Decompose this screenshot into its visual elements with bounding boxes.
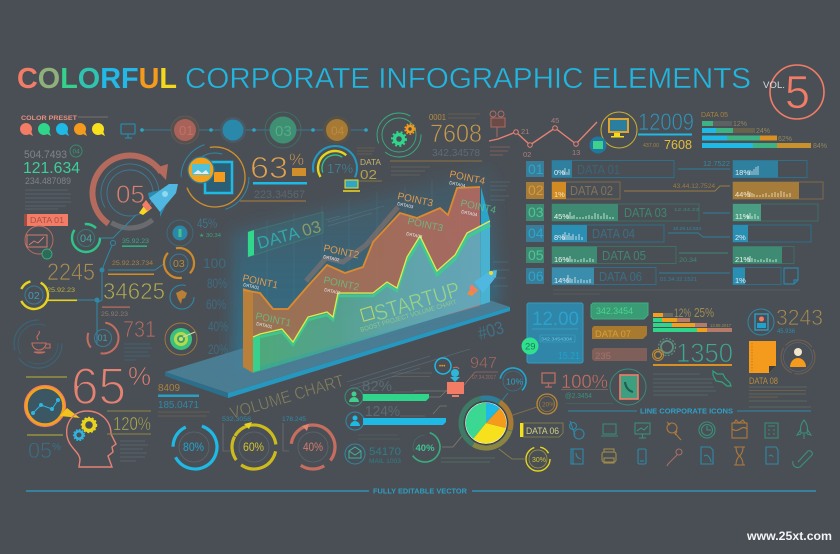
icon: clock — [699, 422, 715, 438]
panel: volume chart: DATA04 — [449, 180, 466, 188]
y axis labels: 100 — [203, 255, 226, 271]
bars: data 05: 12% — [733, 121, 747, 128]
ring: 20%: 20% — [542, 402, 555, 408]
label: data 02: 02 — [360, 167, 377, 182]
back series: red area — [243, 187, 480, 368]
chat and person icon with 947 — [435, 355, 498, 396]
line chart — [489, 116, 597, 159]
labels: back series points: POINT3 — [396, 191, 434, 210]
dial: 17% with laptop — [310, 143, 360, 193]
ring: 30% — [499, 447, 550, 471]
ring: 04: 04 — [80, 233, 92, 245]
tag: 342.3454 — [591, 303, 648, 319]
row 01: DATA 01 — [577, 162, 620, 177]
icon: person circle — [781, 340, 815, 374]
stat: mail 54170: MAIL 1003 — [369, 458, 401, 465]
y axis labels: 20% — [208, 341, 228, 357]
watermark: www.25xt.com — [746, 529, 832, 543]
table: numbered data rows — [526, 160, 699, 285]
row 03 — [526, 204, 699, 221]
icon grid row one — [570, 420, 811, 440]
ring: 60%: 60% — [243, 442, 264, 454]
label: startup: BOOST PROJECT VOLUME CHART — [360, 299, 457, 334]
stat: 63%: % — [289, 150, 304, 169]
stat: 12009: 12009 — [638, 109, 694, 136]
left stats: 234.487089 — [25, 176, 71, 187]
label: data 02: DATA — [360, 158, 382, 167]
y axis labels — [203, 255, 228, 379]
table: connectors: 01.34.32.1521 — [660, 277, 697, 283]
icon: microphone — [667, 449, 682, 466]
table: right bars — [733, 160, 823, 285]
y axis labels: 60% — [206, 296, 226, 312]
bars: stacked: 12% — [674, 306, 691, 320]
row 05: 05 — [528, 247, 544, 263]
line chart: 45 — [551, 116, 559, 125]
table: connectors: 43.44.12.7524 — [673, 184, 716, 190]
row 04: 04 — [528, 225, 544, 241]
tag: 342.3454: 342.3454 — [596, 306, 633, 317]
table: connectors: 12.7522 — [703, 161, 730, 168]
icon: monitor circle — [590, 112, 637, 154]
front series: blue green area — [253, 221, 490, 373]
panel: volume chart: DATA03 — [406, 231, 423, 239]
title: CORPORATE INFOGRAPHIC ELEMENTS — [185, 63, 751, 95]
y axis labels: 0% — [214, 363, 228, 379]
color preset — [20, 115, 108, 136]
icon: notebook — [571, 449, 583, 464]
table: connectors: 12.34.23 — [674, 207, 700, 212]
icon: floppy — [701, 447, 713, 464]
icon: gears circle — [377, 113, 421, 157]
ring: 30%: 30% — [532, 457, 546, 464]
row 05: DATA 05 — [602, 248, 646, 263]
line chart: 13 — [572, 148, 580, 157]
ring: 01 and 731: 01 — [98, 333, 108, 343]
stat: 7608 — [390, 112, 482, 175]
row 02: DATA 02 — [570, 183, 613, 198]
bars: stacked — [653, 305, 732, 332]
badge: vol 5: 5 — [785, 66, 810, 118]
chat and person icon with 947: 07.34.2017 — [472, 375, 496, 381]
icon: document — [784, 268, 798, 284]
timeline: 03 — [275, 123, 292, 140]
heading: line corporate icons: LINE CORPORATE ICONS — [640, 408, 733, 416]
icon: rocket — [139, 184, 178, 217]
icon: info circle with 45%: 45% — [197, 215, 217, 231]
color preset: COLOR PRESET — [21, 115, 78, 122]
icon: gears — [570, 421, 584, 439]
tag: data 01 — [24, 214, 68, 226]
icon: calculator — [765, 423, 778, 438]
row 01: 0% — [554, 168, 565, 177]
ring: 02: 02 — [28, 290, 40, 302]
line chart: 21 — [521, 127, 529, 136]
icon: coffee cup — [14, 320, 62, 368]
label: data 02 — [357, 148, 382, 182]
icon: display — [635, 423, 650, 438]
badge: vol 5: VOL. — [763, 80, 785, 91]
tag: 235 — [592, 348, 647, 362]
stat: 120% — [107, 411, 151, 461]
bars: data 05: 84% — [813, 143, 827, 150]
stat: 05%: 05 — [28, 438, 52, 463]
row 05 — [526, 246, 676, 264]
label: #03: #03 — [475, 317, 506, 344]
table: connectors: 20.34 — [679, 257, 697, 264]
icon: file — [766, 447, 778, 464]
table: connectors: 10.29.12.534 — [673, 226, 702, 231]
stat: mail 54170 — [345, 435, 401, 465]
ring: 04 — [72, 224, 100, 252]
labels: back series points — [241, 169, 486, 292]
timeline — [121, 112, 368, 148]
row 06: 06 — [528, 268, 544, 284]
bar 4: 2% — [735, 233, 746, 242]
panel: time card: 15.21 — [558, 351, 580, 362]
icon: laptop — [601, 424, 618, 436]
ring labels: 532.3058 — [222, 416, 251, 423]
y axis labels: 80% — [207, 275, 227, 291]
ring: 03 — [162, 246, 196, 280]
row 06: DATA 06 — [599, 269, 642, 284]
stat: 120%: 120% — [113, 414, 151, 434]
stat: 7608: 7608 — [430, 120, 482, 148]
stat: 63%: 63 — [250, 150, 288, 185]
bar 1: 18% — [735, 168, 750, 177]
label: data 03: DATA 03 — [255, 217, 323, 253]
tag: 235: 235 — [595, 351, 611, 362]
icon: rocket line — [797, 420, 811, 439]
tag: data 06 — [520, 423, 563, 437]
row 01: 01 — [528, 161, 544, 177]
stat: 12009: 7608 — [664, 137, 692, 152]
panel: volume chart: DATA01 — [256, 321, 273, 329]
chart backdrop — [232, 170, 500, 376]
ring: 40% — [288, 422, 338, 472]
tree connectors with labels: 35.92.23 — [122, 238, 149, 245]
ring: 60% — [224, 417, 284, 477]
row 03: 45% — [554, 212, 569, 221]
left stats: 04 — [72, 148, 80, 156]
table: connectors — [624, 161, 730, 283]
panel: volume chart: DATA03 — [397, 201, 414, 209]
chat and person icon with 947: ••• — [439, 364, 445, 370]
row 06 — [526, 268, 656, 285]
row 02 — [526, 182, 620, 199]
stats: 8409 and 185.0471: 8409 — [158, 383, 180, 394]
y axis labels: 40% — [208, 318, 228, 334]
stat: 3243 with doc icon — [748, 305, 823, 335]
labels: front series points — [254, 198, 497, 330]
platform — [165, 286, 510, 393]
panel: time card: 29 — [525, 342, 536, 352]
panel: time card — [522, 303, 583, 363]
badge: vol 5 — [763, 65, 824, 119]
stat: 3243 with doc icon: 3243 — [776, 305, 823, 330]
tag: data 06: DATA 06 — [526, 426, 559, 436]
tag: data 07 — [592, 326, 647, 340]
dial: 17% with laptop: 17% — [327, 161, 353, 176]
ring: 10%: 10% — [506, 376, 523, 386]
left stats: 504.7493 — [24, 149, 67, 161]
stat: 12009 — [638, 109, 694, 152]
bar 5: 21% — [735, 255, 750, 264]
ring: 03: 03 — [173, 258, 185, 270]
title: COLORFUL — [17, 63, 177, 95]
ring labels — [222, 416, 306, 451]
icon: picture circle — [180, 142, 250, 212]
ring labels: 178.245 — [282, 416, 306, 423]
stat: mail 54170: 54170 — [369, 446, 401, 458]
ring: 02 — [15, 276, 77, 314]
stat: 05%: % — [52, 442, 61, 453]
progress: 124%: 124% — [365, 403, 400, 420]
ring: 10% — [498, 366, 528, 403]
icon: globe — [170, 285, 194, 309]
label: startup — [360, 277, 463, 334]
label: volume chart: VOLUME CHART — [228, 371, 346, 423]
right wall — [481, 187, 490, 305]
stat: 63% — [240, 150, 307, 201]
row 06: 14% — [554, 276, 569, 285]
icon: head with gears — [67, 411, 116, 467]
ring: 40% green — [406, 428, 495, 466]
icon: sale sign — [490, 111, 510, 155]
ring: 05 with arrow: 05 — [116, 181, 145, 209]
ring: 80% — [167, 419, 223, 475]
ring: 40% green: 40% — [416, 443, 435, 454]
label: startup: STARTUP — [371, 277, 463, 326]
bar 2: 44% — [735, 190, 750, 199]
left stats: 121.634 — [23, 160, 80, 177]
icon: wrench — [667, 422, 681, 440]
ring: 05 with arrow — [78, 141, 182, 245]
bars: data 05: DATA 05 — [701, 110, 728, 119]
stat: 65% — [26, 358, 151, 435]
panel: volume chart — [165, 169, 510, 423]
tag: data 07: DATA 07 — [595, 329, 631, 340]
icon: phone — [638, 449, 646, 464]
stat: 100% with phone book — [542, 369, 646, 405]
row 05: 16% — [554, 255, 569, 264]
ring: 80%: 80% — [183, 442, 204, 454]
labels: back series points: POINT2 — [322, 243, 360, 262]
stat: 100% with phone book: 100% — [561, 371, 608, 393]
ring: 01 and 731: 731 — [123, 316, 156, 342]
stat: 65%: % — [128, 361, 151, 391]
stat: 65%: 65 — [71, 358, 126, 416]
pie chart — [451, 388, 521, 458]
icon: paperclip — [793, 451, 812, 468]
text block with tool icon — [653, 371, 731, 395]
progress: 82%: 82% — [362, 378, 392, 395]
row 03: 03 — [528, 204, 544, 220]
row 04: 8% — [554, 233, 565, 242]
chat and person icon with 947: 947 — [470, 355, 497, 372]
labels: front series points: POINT2 — [322, 275, 360, 294]
stat: 100% with phone book: @2.3454 — [565, 393, 592, 400]
bar 3: 11% — [735, 212, 750, 221]
row 03: DATA 03 — [624, 205, 667, 220]
stat: 2245: 2245 — [47, 259, 95, 286]
timeline: 01 — [179, 123, 193, 138]
icon: monitor — [121, 124, 135, 138]
icon: info circle with 45%: ★ 30.34 — [199, 233, 221, 239]
bar 6: 1% — [735, 276, 746, 285]
tree connectors with labels: 25.92.23 — [101, 311, 128, 318]
stats: 8409 and 185.0471: 185.0471 — [158, 400, 199, 411]
progress: 124% — [346, 403, 447, 430]
icon: target — [165, 323, 197, 355]
line chart: 02 — [523, 150, 531, 159]
bars: stacked: 25% — [694, 305, 714, 320]
progress: 82% — [345, 373, 447, 406]
labels: front series points: POINT4 — [459, 198, 497, 217]
tree connectors with labels: 25.92.23.734 — [112, 260, 153, 267]
bars: data 05: 62% — [778, 136, 792, 143]
stat: 12009: 437.00 — [643, 143, 659, 149]
ring: 20% — [507, 394, 557, 417]
icon: info circle with 45% — [167, 215, 221, 246]
panel: volume chart: DATA04 — [461, 209, 478, 217]
panel: time card: 12.00 — [532, 309, 579, 330]
icon: notepad: DATA 08 — [749, 376, 778, 386]
row 04: DATA 04 — [592, 226, 635, 241]
bars: data 05 — [701, 110, 827, 150]
speech bubble network — [24, 386, 80, 426]
panel: volume chart: DATA01 — [243, 282, 260, 290]
panel: time card: 342.3454304 — [541, 336, 573, 342]
timeline: 04 — [331, 124, 345, 138]
stat: 63%: 223.34567 — [254, 189, 305, 201]
row 01 — [526, 160, 674, 178]
labels: back series points: POINT1 — [241, 273, 279, 292]
left stats — [23, 145, 82, 209]
icon: printer — [602, 449, 616, 463]
labels: back series points: POINT4 — [448, 169, 486, 188]
panel: volume chart: DATA02 — [323, 254, 340, 262]
stat: 1350 with gears: 1350 — [676, 338, 733, 368]
tag: data 01: DATA 01 — [30, 215, 64, 225]
tree connectors with labels — [72, 215, 165, 345]
ring: 01 and 731 — [85, 316, 156, 360]
row 02: 02 — [528, 182, 544, 198]
panel: volume chart: DATA02 — [324, 287, 341, 295]
row 02: 1% — [554, 190, 565, 199]
stat: 7608: 0001 — [429, 112, 446, 122]
icon: chart circle — [25, 226, 53, 259]
icon: box — [732, 420, 747, 438]
stat: 3243 with doc icon: 45.936 — [777, 329, 796, 335]
ring: 02: 25.92.23 — [47, 287, 75, 294]
icon: hourglass — [734, 447, 745, 465]
stat: 1350 with gears — [652, 338, 733, 368]
bars: data 05: 24% — [756, 128, 770, 135]
ring: 40%: 40% — [303, 442, 323, 454]
labels: front series points: POINT1 — [254, 311, 292, 330]
labels: front series points: POINT3 — [406, 216, 444, 235]
stat: 7608: 342.34578 — [432, 147, 480, 159]
stat: 34625: 34625 — [103, 278, 165, 304]
icon grid row two — [571, 447, 812, 468]
stats: 8409 and 185.0471 — [158, 383, 210, 416]
icon: notepad — [749, 341, 811, 407]
row 04 — [526, 225, 664, 242]
icon: chart rocket — [467, 270, 497, 296]
bars: stacked: 13.89.2017 — [710, 323, 731, 328]
bottom rule with caption: FULLY EDITABLE VECTOR — [373, 488, 467, 496]
